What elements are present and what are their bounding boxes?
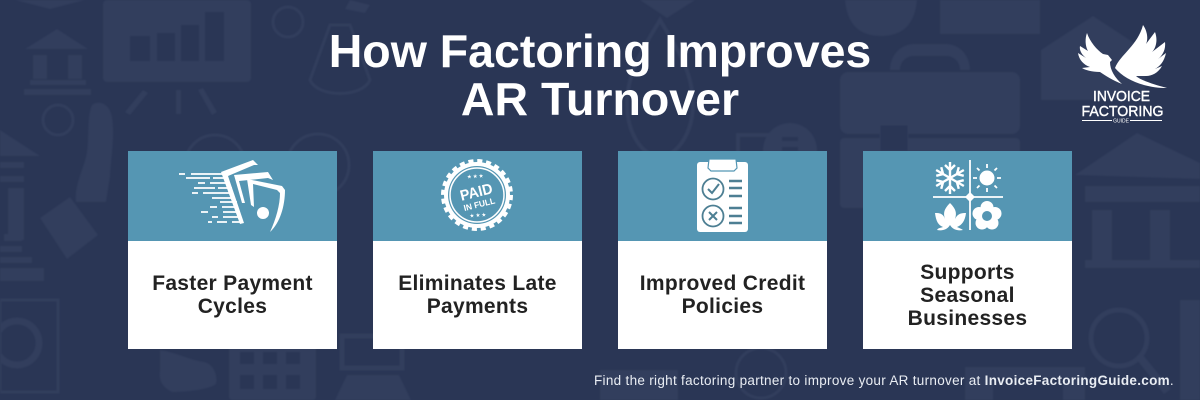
label: Policies bbox=[682, 295, 763, 318]
label: Cycles bbox=[198, 295, 267, 318]
label bbox=[152, 272, 313, 318]
label: Businesses bbox=[908, 306, 1027, 330]
label: Faster Payment bbox=[152, 272, 313, 295]
label bbox=[398, 272, 557, 318]
title bbox=[329, 25, 871, 125]
panel: improved credit policies bbox=[618, 151, 827, 349]
icon: flying banknotes bbox=[179, 160, 285, 232]
icon: paid in full stamp: IN FULL bbox=[463, 195, 496, 213]
logo: FACTORING bbox=[1082, 103, 1164, 120]
label: Seasonal bbox=[920, 284, 1015, 306]
label: Payments bbox=[427, 295, 528, 318]
panel: faster payment cycles bbox=[128, 151, 337, 349]
label bbox=[908, 260, 1027, 330]
footer call to action: Find the right factoring partner to improve your AR turnover at InvoiceFactoringGuide.com. bbox=[594, 373, 1174, 388]
title: How Factoring Improves bbox=[329, 25, 871, 77]
icon: eagle wings bbox=[1078, 25, 1167, 88]
icon: paid in full stamp: ★★★ bbox=[467, 173, 485, 181]
label: Eliminates Late bbox=[398, 272, 557, 295]
logo wordmark: INVOICE bbox=[1093, 88, 1150, 105]
title: AR Turnover bbox=[461, 73, 739, 125]
label: Supports bbox=[920, 260, 1015, 284]
icon: clipboard checklist bbox=[697, 160, 748, 232]
icon: paid in full stamp: ★★★ bbox=[469, 212, 488, 220]
icon: paid in full stamp bbox=[441, 159, 513, 231]
logo: GUIDE bbox=[1113, 118, 1130, 124]
panel: supports seasonal businesses bbox=[863, 151, 1072, 349]
panel: eliminates late payments bbox=[373, 151, 582, 349]
logo bbox=[1078, 25, 1167, 124]
label: Improved Credit bbox=[640, 272, 805, 295]
icon: four seasons bbox=[933, 160, 1003, 230]
icon: paid in full stamp: PAID bbox=[458, 180, 495, 205]
label bbox=[640, 272, 805, 318]
